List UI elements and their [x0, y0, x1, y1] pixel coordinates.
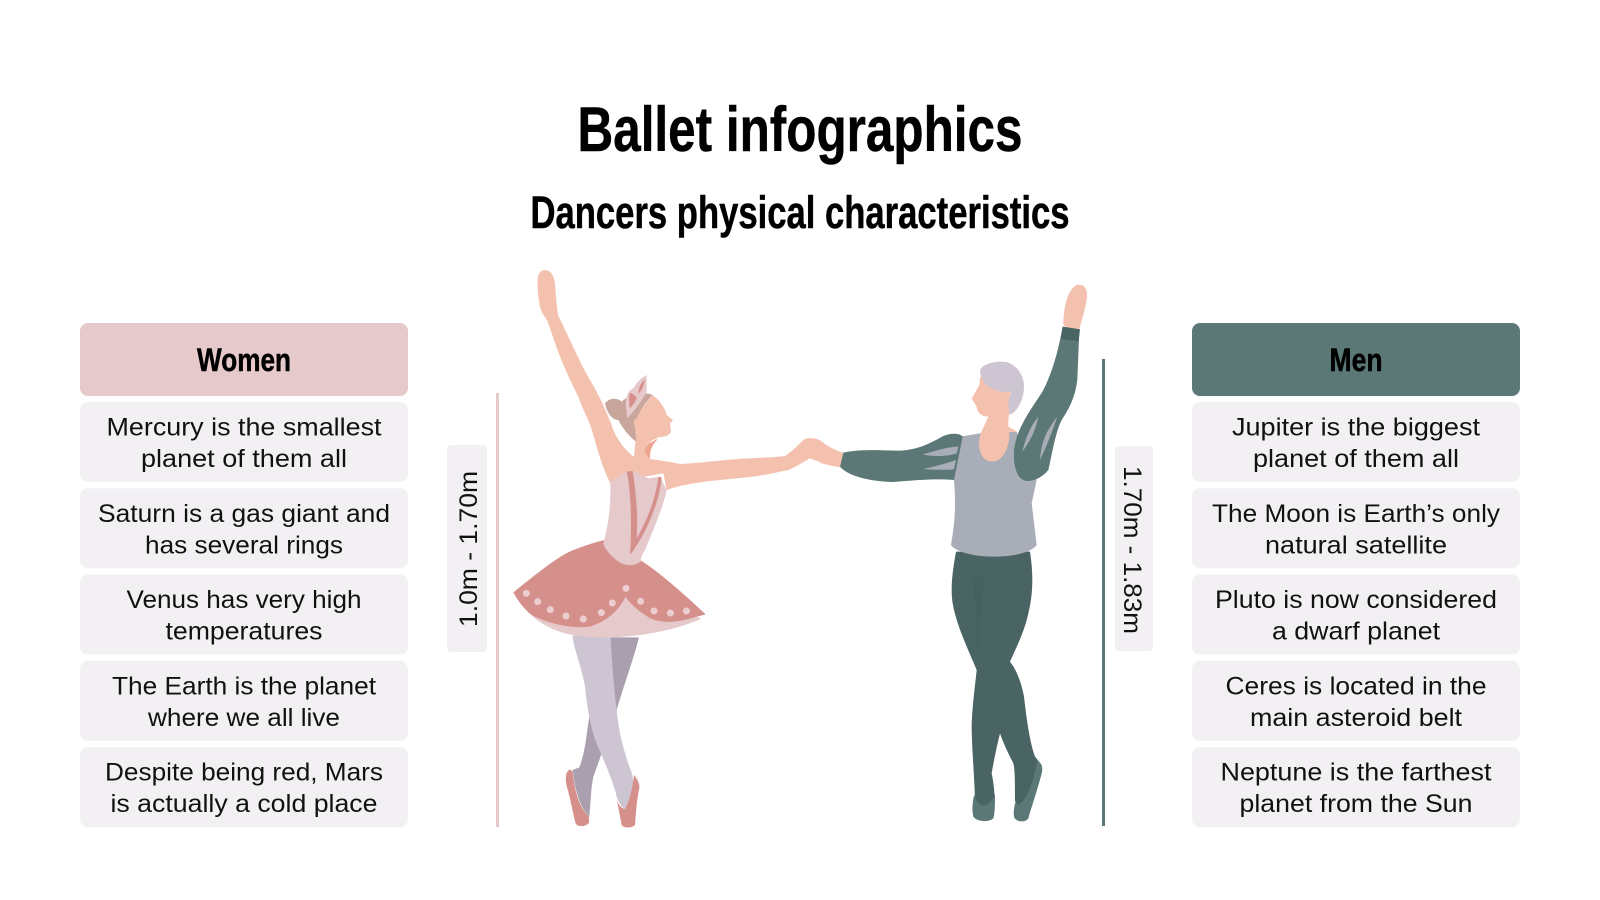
men item: Neptune: [1192, 747, 1520, 827]
women item: Earth: The Earth is the planet: [112, 672, 376, 700]
ballerina hair: [605, 393, 652, 442]
title: Ballet infographics: [578, 95, 1022, 165]
men item: Ceres: [1192, 661, 1520, 741]
women item: Venus: Venus has very high: [126, 586, 362, 614]
panel: men: [1192, 323, 1520, 827]
women item: Saturn: [80, 488, 408, 568]
women item: Earth: where we all live: [147, 704, 340, 732]
ballerina face: [633, 395, 673, 442]
ballerina bodice: [603, 471, 667, 565]
women header: [80, 323, 408, 396]
women item: Mars: Despite being red, Mars: [105, 759, 383, 787]
ballerina illustration: [513, 270, 840, 827]
height label: women: [447, 445, 487, 652]
men header: [1192, 323, 1520, 396]
men item: Jupiter: Jupiter is the biggest: [1232, 414, 1480, 442]
women item: Earth: [80, 661, 408, 741]
male dancer raised arm: [1014, 285, 1087, 481]
height line: men: [1102, 359, 1105, 826]
men item: Pluto: Pluto is now considered: [1215, 586, 1497, 614]
men item: Jupiter: planet of them all: [1253, 445, 1459, 473]
ballerina arms and neck: [537, 270, 840, 490]
male dancer tank top: [951, 432, 1037, 557]
ballerina legs: [566, 635, 639, 827]
subtitle: Dancers physical characteristics: [530, 187, 1070, 238]
height label: women: 1.0m - 1.70m: [455, 471, 483, 627]
male dancer left arm: [820, 434, 963, 482]
male dancer head and neck: [972, 377, 1018, 462]
women item: Mars: is actually a cold place: [110, 790, 378, 818]
men item: Jupiter: [1192, 402, 1520, 482]
height line: women: [496, 393, 499, 827]
women item: Mars: [80, 747, 408, 827]
male dancer illustration: [820, 285, 1087, 821]
height label: men: 1.70m - 1.83m: [1118, 466, 1146, 634]
ballerina neck shadow: [644, 439, 658, 458]
male dancer legs: [952, 552, 1042, 821]
women item: Saturn: has several rings: [145, 531, 343, 559]
men item: Moon: The Moon is Earth’s only: [1212, 500, 1501, 528]
men item: Pluto: a dwarf planet: [1272, 618, 1440, 646]
women item: Venus: [80, 575, 408, 655]
ballerina tiara: [626, 375, 647, 418]
men item: Pluto: [1192, 575, 1520, 655]
height label: men: [1115, 446, 1153, 651]
men item: Ceres: Ceres is located in the: [1226, 672, 1486, 700]
women item: Mercury: Mercury is the smallest: [106, 414, 382, 442]
women item: Saturn: Saturn is a gas giant and: [98, 500, 390, 528]
men item: Neptune: planet from the Sun: [1240, 790, 1472, 818]
men header: Men: [1330, 342, 1382, 378]
men item: Neptune: Neptune is the farthest: [1220, 759, 1492, 787]
women item: Venus: temperatures: [166, 618, 322, 646]
panel: women: [80, 323, 408, 827]
men item: Moon: [1192, 488, 1520, 568]
ballerina tutu: [513, 540, 706, 638]
men item: Ceres: main asteroid belt: [1250, 704, 1462, 732]
male dancer hair: [980, 362, 1024, 415]
women item: Mercury: planet of them all: [141, 445, 347, 473]
women item: Mercury: [80, 402, 408, 482]
men item: Moon: natural satellite: [1265, 531, 1447, 559]
women header: Women: [197, 342, 291, 378]
